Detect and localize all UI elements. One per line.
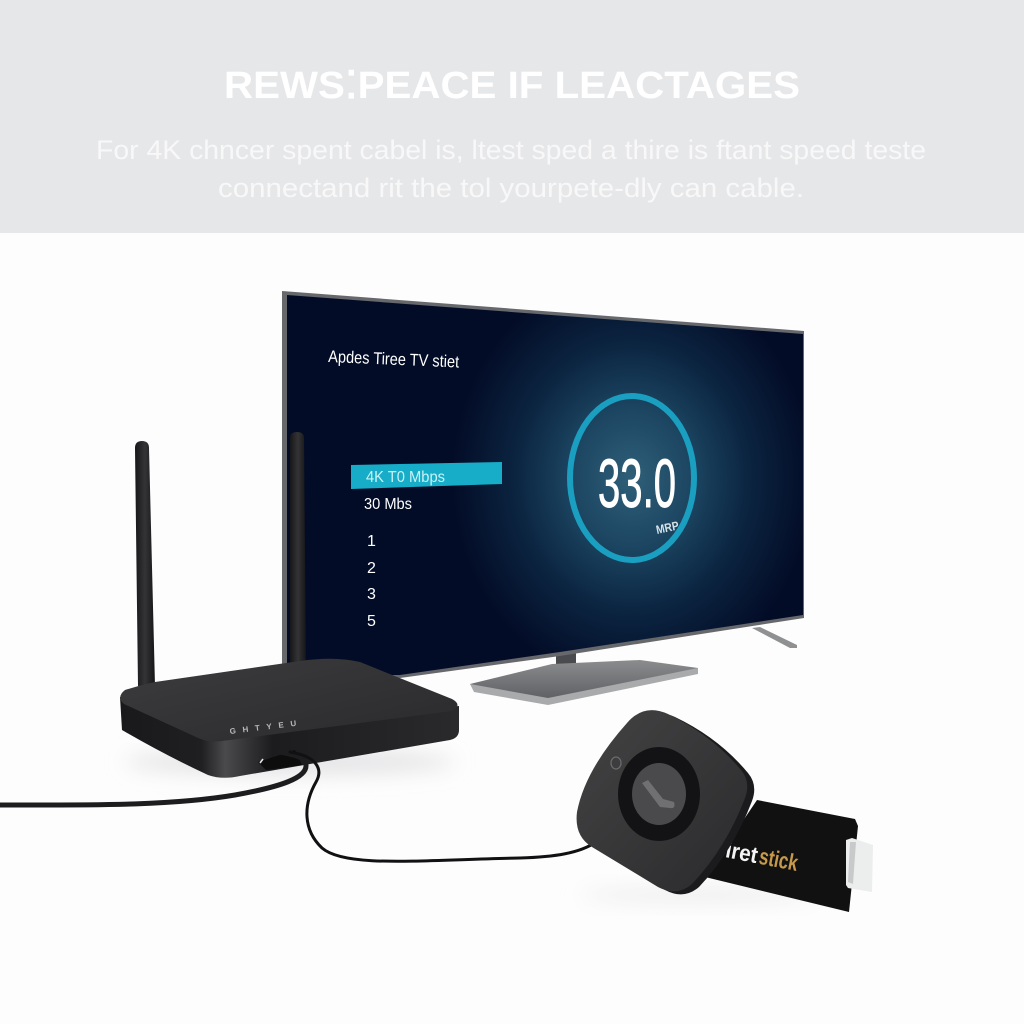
header panel — [0, 0, 1024, 233]
number list: 3 — [367, 586, 376, 603]
dongle cable — [290, 752, 596, 861]
speed gauge: MRP — [655, 518, 680, 537]
number list: 5 — [367, 613, 376, 630]
subtitle — [96, 135, 926, 203]
menu row: 30 Mbs — [364, 496, 412, 513]
highlighted menu row: 4K T0 Mbps — [366, 469, 445, 486]
speed gauge: 33.0 — [598, 445, 676, 522]
subtitle: connectand rit the tol yourpete-dly can cable. — [218, 173, 804, 203]
dial glyph — [642, 780, 674, 808]
dial outer ring — [618, 747, 700, 841]
router label: GHTYEU — [229, 719, 297, 736]
hdmi connector — [846, 838, 873, 892]
led ring — [611, 757, 621, 769]
dongle shadow — [580, 888, 820, 902]
title: REWS⁚PEACE IF LEACTAGES — [224, 65, 800, 107]
dial centre — [632, 763, 686, 825]
tv rear leg — [752, 627, 797, 648]
right antenna — [290, 432, 306, 664]
screen heading: Apdes Tiree TV stiet — [328, 347, 460, 371]
television — [282, 291, 804, 705]
router shadow — [125, 749, 455, 775]
speed gauge — [570, 396, 694, 560]
number list: 1 — [367, 533, 376, 550]
router — [120, 432, 459, 778]
number list — [367, 533, 376, 630]
fire stick — [705, 800, 873, 912]
highlighted menu row — [351, 462, 502, 489]
router top — [120, 659, 458, 742]
dongle — [577, 710, 754, 894]
number list: 2 — [367, 560, 376, 577]
stick logo: iret — [724, 836, 760, 868]
router port — [258, 750, 302, 770]
tv stand — [470, 652, 698, 705]
stick logo: stick — [757, 843, 800, 876]
dongle face — [577, 710, 747, 891]
stick body — [705, 800, 858, 912]
subtitle: For 4K chncer spent cabel is, ltest sped a thire is ftant speed teste — [96, 135, 926, 165]
router body — [120, 697, 459, 778]
dongle edge — [584, 713, 754, 894]
stick logo — [724, 836, 800, 876]
tv screen — [287, 295, 803, 675]
cables — [0, 752, 596, 861]
left antenna — [135, 441, 155, 686]
ethernet cable — [0, 752, 306, 805]
tv bezel — [282, 291, 804, 678]
